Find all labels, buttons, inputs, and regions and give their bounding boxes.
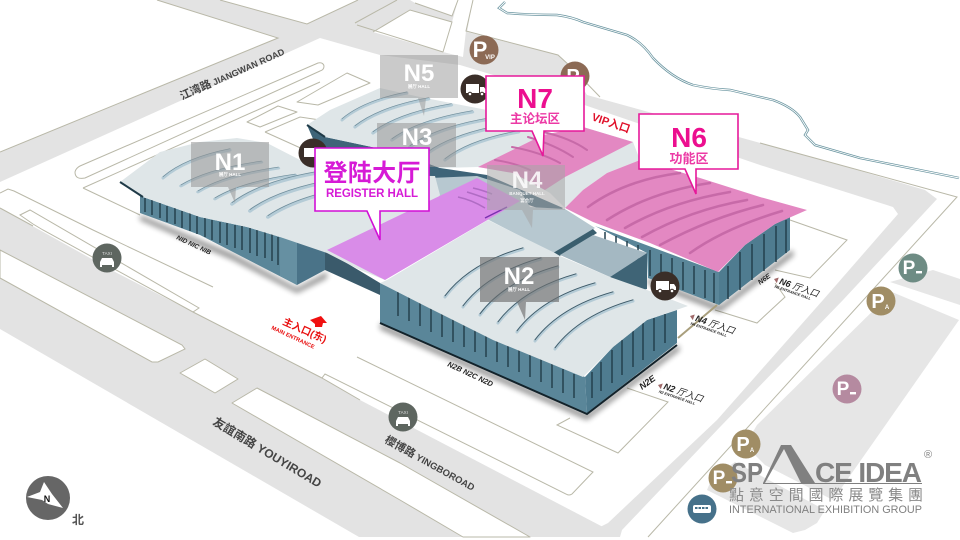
icon: bus — [688, 494, 716, 524]
logo: Space Idea: INTERNATIONAL EXHIBITION GROUP — [729, 504, 922, 516]
icon: parking pink — [832, 374, 862, 404]
callout: N7 main forum — [486, 76, 584, 156]
callout: N4: BANQUET HALL — [509, 191, 545, 196]
icon: parking A north: P — [871, 291, 885, 313]
entrance label: N2: N2 ENTRANCE HALL — [658, 390, 696, 406]
building: N5 and N3 hall roof — [307, 88, 640, 208]
callout: N7 main forum: 主论坛区 — [510, 111, 560, 126]
callout: N1 — [191, 142, 269, 203]
central banquet roof — [430, 176, 595, 253]
entrance label: N4 — [687, 311, 737, 340]
entrance label: N6 — [771, 274, 821, 303]
callout: N5: 展厅 HALL — [408, 84, 430, 90]
entrance label: N6: N6 厅入口 — [778, 276, 821, 299]
callout: N4 — [487, 165, 565, 228]
wall label: N6E: N6E — [757, 273, 772, 287]
wall label: N2E: N2E — [637, 373, 658, 392]
callout: register hall — [315, 148, 429, 240]
icon: parking A north — [866, 286, 896, 316]
river — [499, 2, 959, 178]
icon: parking A south: A — [750, 448, 755, 454]
building shadows — [140, 215, 794, 420]
building: N3 and N5 hall wall — [307, 125, 563, 214]
VIP entrance label: VIP入口 — [590, 111, 632, 136]
building: N2 hall — [380, 220, 688, 414]
icon: taxi west — [92, 244, 122, 272]
callout: register hall: 登陆大厅 — [324, 160, 420, 187]
callout: N3: 展厅 HALL — [406, 148, 428, 154]
callout: N6 function area: N6 — [671, 122, 707, 153]
entrance path — [678, 305, 717, 338]
icon: parking green: P — [903, 258, 916, 279]
icon: parking pink: P — [837, 379, 850, 400]
icon: VIP parking: VIP — [485, 55, 495, 61]
callout: N4: 宴会厅 — [520, 197, 534, 204]
icon: truck east — [650, 272, 680, 300]
icon: truck west — [298, 138, 328, 168]
callout: N5 — [380, 55, 458, 116]
entrance label: N6: N6 ENTRANCE HALL — [774, 285, 812, 301]
icon: VIP parking — [470, 36, 498, 64]
icon: taxi south: TAXI — [398, 410, 408, 415]
icon: parking A south: P — [736, 434, 750, 456]
road network: Youyi road and Yingbo road — [0, 208, 612, 537]
roof: N7 main forum (pink) — [478, 127, 633, 190]
icon: parking A south — [732, 430, 760, 458]
logo: Space Idea — [729, 445, 932, 516]
north label: 北 — [72, 513, 84, 527]
parking areas — [707, 270, 960, 533]
callout: N6 function area — [639, 114, 738, 194]
entrance label: N4: N4 厅入口 — [694, 313, 737, 336]
callout: N7 main forum: N7 — [517, 83, 553, 114]
callout: N2: 展厅 HALL — [508, 287, 530, 293]
logo: Space Idea: 點意空間國際展覽集團 — [729, 486, 923, 504]
icon: parking bicycle — [708, 464, 738, 492]
building: N6 hall — [565, 160, 807, 305]
entrance label: N2: N2 厅入口 — [662, 381, 705, 404]
compass N: N — [44, 494, 50, 504]
road label: Jiangwan Road: 江湾路 JIANGWAN ROAD — [178, 44, 287, 103]
roof: register hall (purple) — [327, 178, 520, 280]
wall label: N2 gates: N2B N2C N2D — [446, 360, 495, 389]
icon: truck north — [460, 74, 490, 104]
callout: N4: N4 — [512, 167, 543, 194]
road label: Yingbo Road: 櫻博路 YINGBOROAD — [383, 432, 478, 494]
entrance label: N4: N4 ENTRANCE HALL — [690, 322, 728, 338]
compass — [26, 476, 70, 520]
icon: parking green — [898, 254, 928, 282]
callout: N1: 展厅 HALL — [219, 172, 241, 178]
logo: Space Idea: SP — [731, 457, 763, 488]
building: connecting block — [553, 229, 647, 292]
icon: VIP parking: P — [473, 37, 487, 62]
main entrance arrow and label: MAIN ENTRANCE — [270, 325, 315, 351]
icon: parking A north: A — [885, 305, 890, 311]
icon: parking behind N7 — [560, 62, 590, 90]
callout: N5: N5 — [404, 60, 434, 87]
main entrance arrow and label: 主入口(东) — [281, 315, 329, 346]
logo: Space Idea: ® — [924, 449, 932, 461]
callout: N2: N2 — [504, 263, 534, 290]
callout: N3 — [377, 123, 456, 167]
callout: N2 — [480, 257, 559, 320]
callout: N6 function area: 功能区 — [669, 151, 709, 166]
entrance label: N2 — [655, 379, 705, 408]
wall label: N1 gates: NID NIC NIB — [175, 234, 212, 257]
logo: Space Idea: CE IDEA — [815, 457, 922, 488]
road label: Youyi Road: 友誼南路 YOUYIROAD — [210, 414, 325, 491]
icon: parking bicycle: P — [713, 468, 726, 489]
callout: N1: N1 — [215, 149, 245, 176]
icon: taxi south — [388, 402, 418, 432]
icon: taxi west: TAXI — [102, 251, 112, 256]
callout: N3: N3 — [402, 124, 432, 151]
icon: parking behind N7: P — [566, 66, 580, 88]
building: N1 hall walls and roof — [120, 138, 440, 295]
callout: register hall: REGISTER HALL — [326, 188, 418, 200]
main entrance arrow and label — [270, 315, 329, 351]
